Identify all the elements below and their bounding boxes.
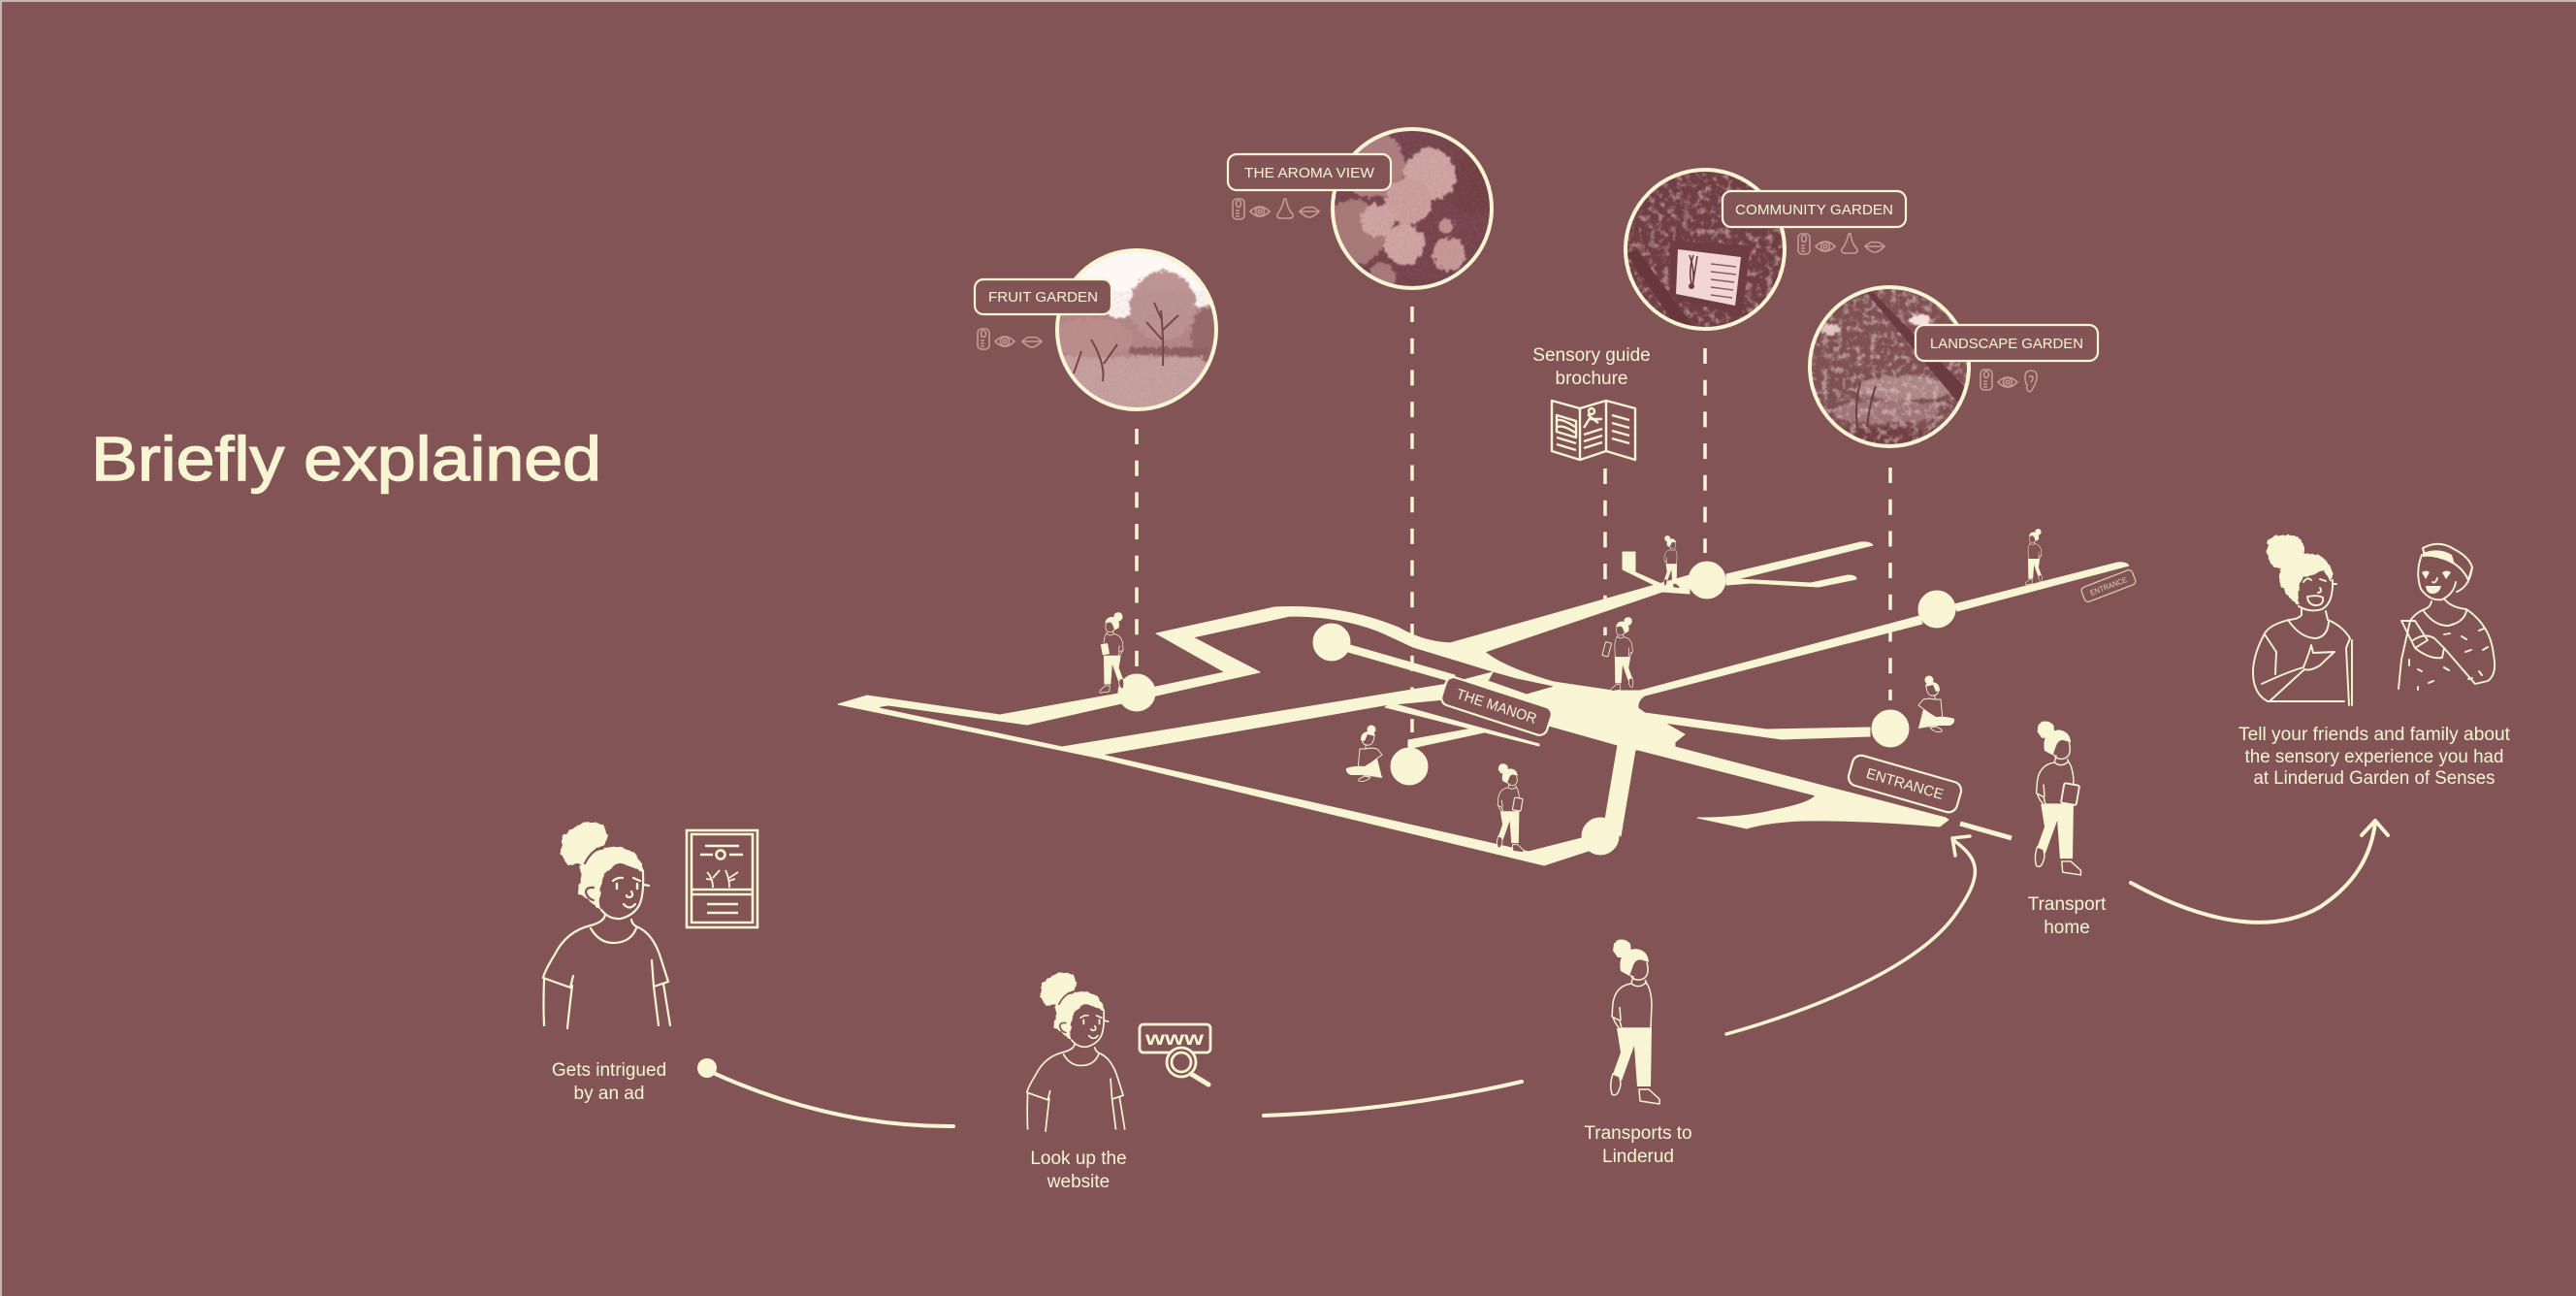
sensory guide text: brochure [1556,369,1627,389]
label: entrance: ENTRANCE [1864,765,1946,803]
person: transport home [2035,721,2080,875]
tablet [1101,643,1110,656]
callout: the aroma view: THE AROMA VIEW [1244,165,1375,181]
sense icons: fruit garden [978,329,1042,349]
person: community garden walker [1664,535,1680,588]
arrow: transport home to friends [2131,821,2388,923]
text: tell your friends: Tell your friends and family about [2238,725,2511,745]
callout: landscape garden: LANDSCAPE GARDEN [1930,336,2083,352]
callout: fruit garden [975,279,1111,314]
waypoint: aroma view [1391,748,1428,785]
waypoint: top stem [1313,624,1350,661]
sense icons: community garden [1798,234,1884,254]
label: small entrance [2080,568,2137,603]
callout: fruit garden: FRUIT GARDEN [988,289,1098,306]
person: east road walker [2025,529,2042,585]
person: brochure reader [1602,617,1633,691]
garden path map [838,542,2129,865]
person: look up website [1027,973,1125,1131]
person: lower walker with tablet [1497,763,1524,853]
icon: www search: www [1144,1029,1204,1050]
dashed connectors [1137,307,1890,732]
text: look up website: website [1046,1172,1110,1192]
arrow: to entrance [1726,836,1975,1034]
callout: community garden: COMMUNITY GARDEN [1735,202,1893,218]
waypoint: landscape garden [1872,710,1909,747]
photo: aroma view [1331,127,1494,290]
person: transports to Linderud [1611,939,1659,1104]
icon: www search [1140,1024,1210,1085]
sense icons: aroma view [1233,199,1319,219]
waypoint: community garden [1689,562,1725,599]
waypoint: fruit garden [1118,674,1155,711]
photo: landscape garden [1804,281,1974,451]
text: transports to Linderud: Linderud [1602,1147,1674,1167]
person: seated near aroma [1346,726,1382,782]
sensory guide text: Sensory guide [1532,345,1651,366]
label: entrance [1847,754,1963,814]
sense icons: landscape garden [1980,370,2037,392]
title: Briefly explained [91,424,601,494]
callout: the aroma view [1228,154,1391,190]
waypoint: east road [1918,591,1955,628]
label: the manor: THE MANOR [1454,686,1539,728]
label: small entrance: ENTRANCE [2089,575,2128,598]
person: seated near landscape [1918,675,1954,731]
label: the manor [1439,675,1554,737]
callout: community garden [1723,191,1906,227]
waypoint: south [1582,818,1619,855]
text: gets intrigued: by an ad [574,1084,644,1104]
connector: website to transport [1264,1082,1522,1116]
tablet [2061,783,2079,805]
person: woman telling story [2253,535,2352,705]
text: transports to Linderud: Transports to [1584,1123,1692,1144]
person: intrigued by ad [543,823,670,1028]
photo: fruit garden [1055,248,1218,411]
phone [1602,642,1612,657]
text: tell your friends: the sensory experience you had [2244,747,2504,767]
text: look up website: Look up the [1030,1149,1127,1169]
entrance road stub [1960,824,2012,838]
photo: community garden sign [1620,165,1789,335]
text: tell your friends: at Linderud Garden of Senses [2254,768,2495,789]
icon: brochure [1552,401,1635,460]
text: gets intrigued: Gets intrigued [552,1060,666,1081]
person: fruit garden walker [1100,612,1124,693]
text: transport home: home [2044,918,2090,938]
callout: landscape garden [1916,325,2098,361]
icon: poster ad [687,830,757,927]
start dot and curve [697,1058,953,1126]
tablet [1512,797,1523,811]
person: friend with phone [2399,544,2495,690]
text: transport home: Transport [2028,894,2107,915]
